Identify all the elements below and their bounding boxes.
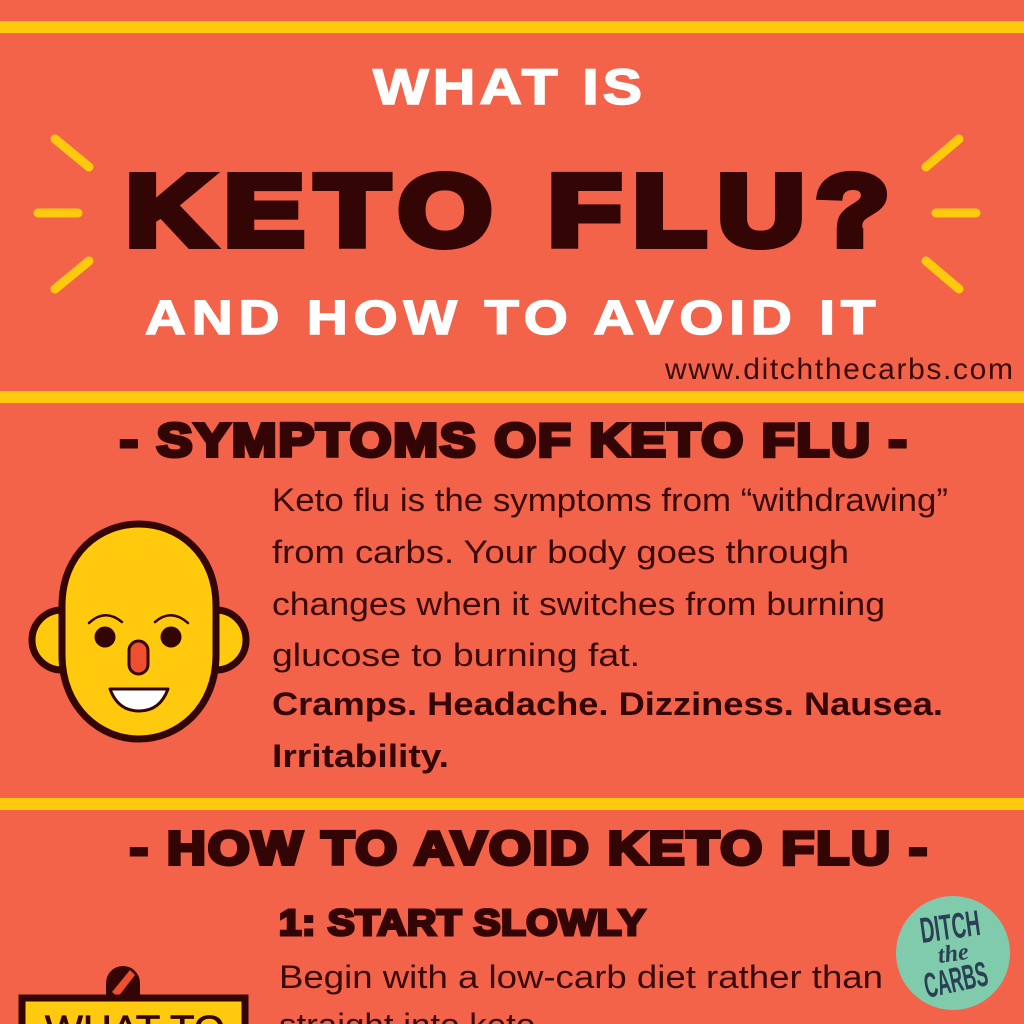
panel: symptoms — [32, 414, 948, 774]
heading: and how to avoid it: AND HOW TO AVOID IT — [145, 291, 875, 345]
text block: symptoms description: Keto flu is the symptoms from “withdrawing” — [272, 482, 948, 518]
text block: symptoms description: glucose to burning fat. — [272, 637, 640, 673]
text block: symptoms description: from carbs. Your body goes through — [272, 534, 849, 570]
heading: symptoms of keto flu: - SYMPTOMS OF KETO FLU - — [120, 414, 906, 466]
icon: left rays — [38, 139, 89, 289]
text block: symptom list — [272, 686, 943, 774]
text block: symptoms description — [272, 482, 948, 673]
icon: smiling face — [32, 524, 246, 739]
panel: title — [38, 58, 1013, 386]
heading: start slowly: 1: START SLOWLY — [279, 903, 645, 943]
text block: start slowly: Begin with a low-carb diet rather than — [279, 959, 883, 995]
text block: symptom list: Irritability. — [272, 738, 449, 774]
icon: what to sign — [22, 966, 245, 1024]
heading: how to avoid keto flu: - HOW TO AVOID KETO FLU - — [130, 822, 927, 874]
panel: how to avoid — [22, 822, 1010, 1024]
heading: what is: WHAT IS — [373, 58, 642, 115]
logo: ditch the carbs — [896, 896, 1010, 1010]
icon: right rays — [926, 139, 976, 289]
website url: www.ditchthecarbs.com — [664, 353, 1013, 386]
text block: symptom list: Cramps. Headache. Dizziness. Nausea. — [272, 686, 943, 722]
heading: keto flu: KETO FLU? — [126, 155, 889, 267]
logo: ditch the carbs: the — [936, 939, 971, 969]
text block: start slowly — [279, 959, 883, 1024]
text block: symptoms description: changes when it switches from burning — [272, 586, 885, 622]
